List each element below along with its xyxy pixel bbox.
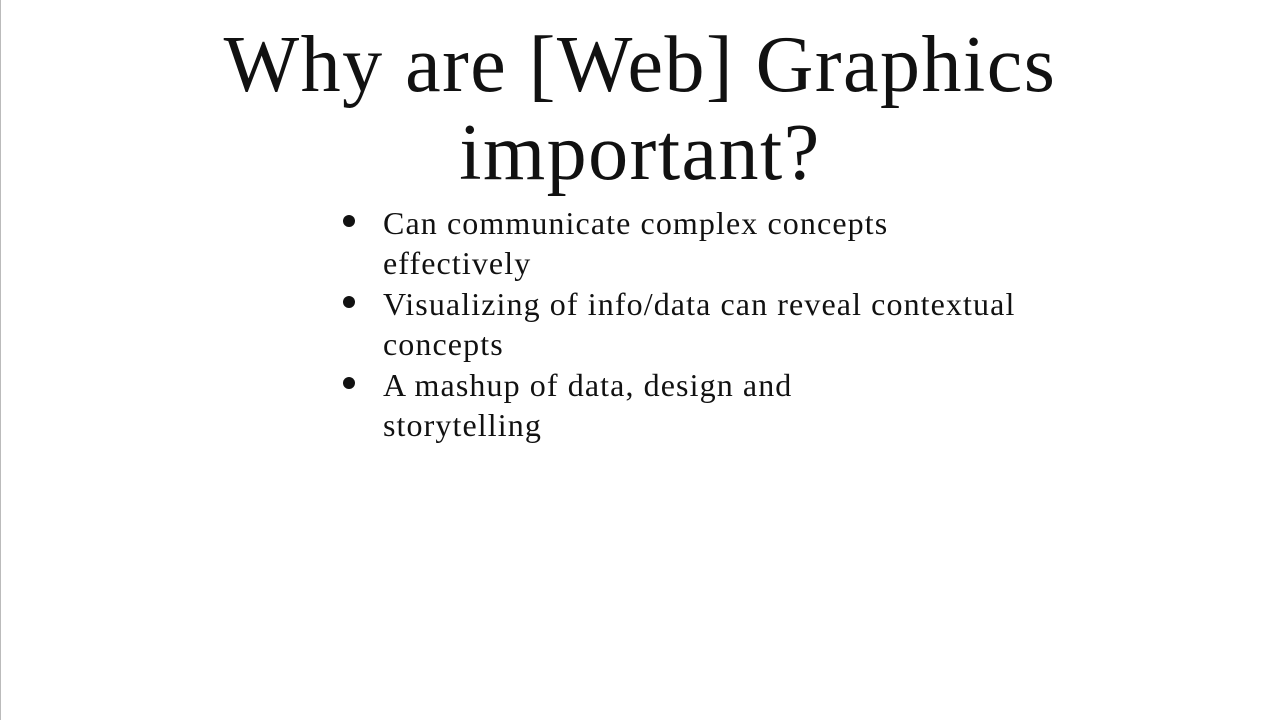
bullet 1 bbox=[343, 205, 888, 281]
title bbox=[224, 21, 1056, 197]
bullet 1: effectively bbox=[383, 245, 531, 281]
bullet list bbox=[343, 205, 1015, 443]
title: important? bbox=[459, 109, 821, 197]
bullet 2: Visualizing of info/data can reveal contextual bbox=[383, 286, 1015, 322]
bullet 2 bbox=[343, 286, 1015, 362]
bullet 3: A mashup of data, design and bbox=[383, 367, 792, 403]
bullet 3: storytelling bbox=[383, 407, 542, 443]
bullet 3 bbox=[343, 367, 792, 443]
bullet 1: Can communicate complex concepts bbox=[383, 205, 888, 241]
bullet 2: concepts bbox=[383, 326, 504, 362]
title: Why are [Web] Graphics bbox=[224, 21, 1056, 109]
